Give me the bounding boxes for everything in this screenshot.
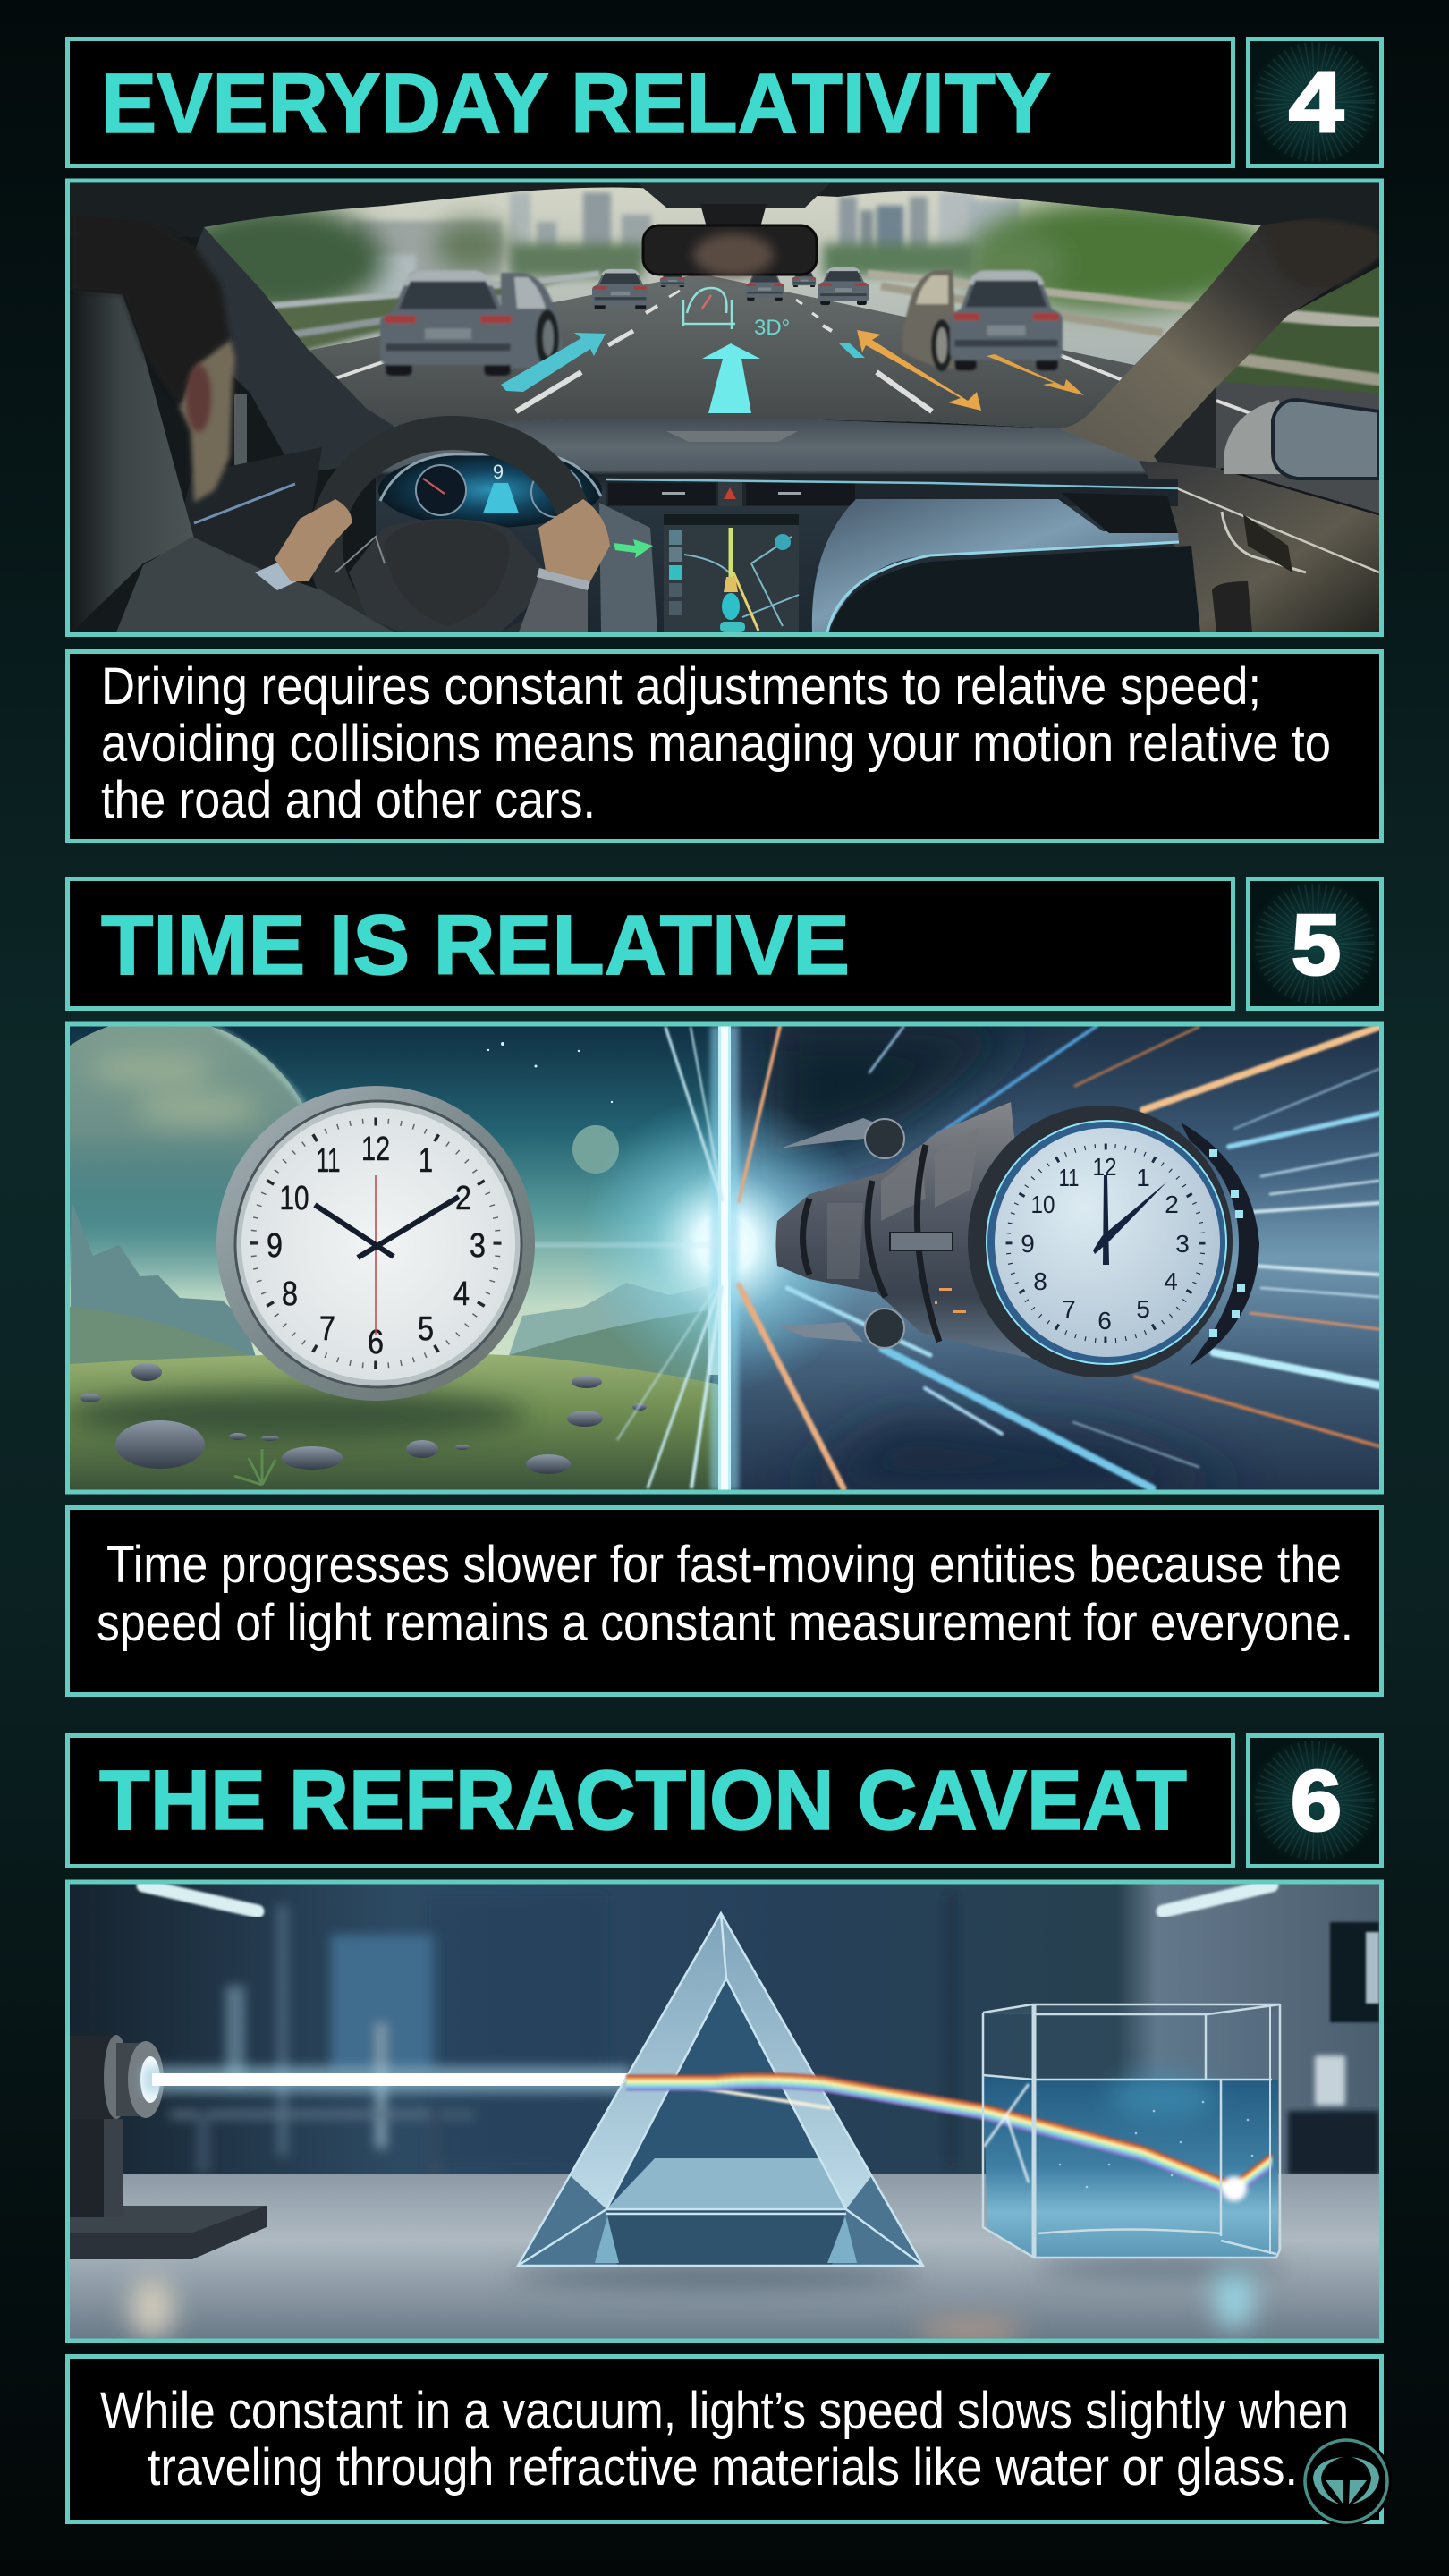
moon [572,1125,619,1174]
console left of screen [599,503,657,632]
caption text [97,1536,1353,1652]
lab wall [70,1884,1379,2175]
left hand [275,499,352,581]
stars [487,1042,613,1103]
caption panel [68,1508,1381,1694]
ship clock numerals: 5 [1136,1295,1150,1323]
rear-view mirror [643,204,817,276]
number badge 6 [1249,1735,1381,1866]
ship hull [776,1102,1038,1360]
clock numerals: 3 [470,1227,486,1265]
illustration: clocks [0,1018,1381,1492]
ship clock hands [1093,1175,1167,1265]
right vent [1062,493,1178,533]
planet clouds [89,1053,259,1127]
ship wing bottom [780,1322,863,1342]
planet limb glow [215,1027,318,1172]
door trim lines [1168,469,1379,572]
windshield view [204,188,1261,428]
prism right facet [721,1913,872,2209]
illustration: prism and water tank [68,1882,1381,2343]
right hills [509,1310,708,1382]
right hand [538,499,610,581]
caption text [101,657,1331,829]
clock numerals: 9 [267,1227,283,1265]
tank water [983,2075,1278,2258]
laser beam [143,2066,631,2093]
clock numerals: 6 [368,1324,384,1361]
badge rays [1275,903,1355,984]
ship engine bottom [865,1309,904,1348]
left door trim [152,447,322,626]
lane dash: teal [839,343,865,358]
prism right corner [832,2175,923,2266]
clock numerals: 2 [455,1180,471,1217]
clock numerals [267,1131,486,1361]
section 6: the refraction caveat [68,1735,1381,2522]
right shirt cuff [537,568,590,590]
lane markings [335,291,1149,411]
roof console [638,183,830,208]
hull plates [827,1127,979,1279]
clock inner ring [235,1101,521,1387]
bottle [1315,2055,1345,2106]
glove box [830,546,1200,632]
hull bracket [890,1233,953,1250]
rainbow starburst [984,2084,1029,2182]
rainbow beam [626,2074,1272,2197]
rocks [80,1363,647,1474]
table [70,2174,1379,2340]
ship clock numerals [1021,1153,1190,1335]
side window view [1199,259,1386,528]
title bar [68,1735,1233,1866]
planet [0,1018,321,1340]
prism edges [518,1913,923,2266]
driver suit shoulder [116,537,394,632]
outer clock ring [968,1106,1233,1377]
clock face [242,1108,515,1380]
ship clock face [995,1128,1220,1357]
dashboard [376,419,1199,632]
ship clock numerals: 10 [1030,1191,1055,1218]
heading: TIME IS RELATIVE [101,898,850,993]
right arm sleeve [519,575,588,632]
prism [518,1913,923,2266]
arrow: orange right [987,354,1084,395]
arrow: orange long [857,330,981,411]
ring lights [1209,1149,1245,1337]
door panel [1139,461,1379,632]
clock numerals: 12 [361,1131,390,1168]
clock rim [216,1086,535,1401]
hull bands [803,1145,939,1342]
light burst [578,1096,873,1391]
blue clock bezel [987,1121,1226,1364]
clock numerals: 7 [319,1310,335,1348]
blurred lab equipment [170,1896,953,2174]
dash top inset [666,431,798,442]
section 5: time is relative [0,878,1381,1694]
caption text [100,2382,1349,2496]
back counter [1288,2111,1379,2175]
wall frame [1330,1922,1379,2022]
ship wing top [780,1118,881,1148]
ship clock numerals: 6 [1097,1307,1112,1335]
ship clock numerals: 7 [1062,1295,1076,1323]
left hills [70,1307,258,1373]
clock numerals: 5 [418,1310,434,1348]
caption text: Driving requires constant adjustments to relative speed; [101,657,1261,716]
upper pillar shadow [1261,220,1379,287]
tank edges [983,2004,1280,2258]
instrument cluster [378,453,602,528]
left: sky [70,1026,725,1375]
laser head [70,2035,164,2119]
heading: EVERYDAY RELATIVITY [101,56,1051,151]
steering wheel [326,433,580,658]
caption text: Time progresses slower for fast-moving entities because the [106,1536,1342,1594]
right dash panel [812,499,1179,632]
title bar [68,878,1233,1009]
instrument cluster: 9 [493,461,504,483]
clock ticks [253,1121,498,1366]
hull lights [935,1288,966,1313]
caption text: the road and other cars. [101,771,596,829]
left side window [234,394,247,465]
ship clock numerals: 4 [1164,1267,1178,1295]
trim line above vents [606,479,1178,488]
table reflections [130,2260,1288,2343]
heading: THE REFRACTION CAVEAT [99,1753,1187,1848]
surrounding cars [660,275,685,287]
grass [70,1352,729,1490]
ship clock numerals: 11 [1059,1164,1079,1191]
illustration frame [68,1882,1381,2341]
clock numerals: 10 [279,1180,309,1217]
plant [234,1449,275,1485]
logo badge [1301,2436,1392,2527]
clock numerals: 8 [282,1275,298,1313]
number: 4 [1289,55,1343,150]
arrow: cyan left lane [501,333,606,392]
caption panel [68,2356,1381,2522]
prism left facet [570,1913,726,2209]
clock numerals: 4 [453,1275,470,1313]
driver seat [72,291,194,632]
driver head [72,209,235,503]
right roof pillar [1058,222,1379,468]
rear ring [1181,1123,1259,1366]
second white beam [648,2080,831,2108]
prism interior lower [606,2158,846,2209]
right mountains [509,1283,708,1377]
badge rays [1275,1760,1355,1841]
right: hyperspace background [725,1026,1379,1490]
vent strip [606,479,1178,506]
ship clock ticks [1008,1146,1203,1341]
beam exit glow [1222,2176,1247,2201]
left side rays [528,1027,723,1488]
water sparkles [1059,2101,1253,2188]
clock numerals: 11 [317,1142,340,1180]
ship clock numerals: 3 [1175,1230,1190,1258]
number badge 5 [1249,878,1381,1009]
number badge 4 [1249,39,1381,166]
frame picture [1366,1932,1379,2004]
ship clock numerals: 1 [1136,1164,1150,1191]
title bar [68,39,1233,166]
prism interior upper [606,1979,846,2209]
green arrow [614,539,653,558]
prism corner highlights [595,2216,619,2263]
ship engine top [865,1119,904,1158]
ground clock [216,1086,535,1401]
headliner edge [70,183,1379,227]
ship clock numerals: 2 [1165,1191,1179,1218]
water bright patch [1109,2075,1216,2120]
number: 5 [1292,897,1341,993]
dark pillar triangle [1154,386,1216,470]
left mountains [70,1201,259,1368]
door handle [1243,514,1292,572]
arrow: cyan centre [702,343,760,413]
ceiling lights [143,1885,1272,1911]
wing mirror [1224,400,1379,479]
laser stand [70,2119,267,2259]
dark corners [769,1026,1252,1490]
illustration frame [68,181,1381,635]
section 4: everyday relativity [68,39,1386,841]
vertical light beam [710,1026,739,1490]
hour and minute hands [315,1197,459,1258]
road surface [309,275,1134,428]
second hand [375,1175,377,1335]
spaceship [776,1102,1259,1377]
ship clock numerals: 12 [1093,1153,1116,1181]
headliner [70,183,1379,237]
HUD label 3D: 3D° [754,316,790,340]
left verge [275,281,564,351]
guardrails [268,274,1199,335]
panel trim [827,542,1179,632]
infotainment screen [664,514,799,632]
caption text: traveling through refractive materials like water or glass. [148,2438,1298,2496]
caption text: avoiding collisions means managing your motion relative to [101,715,1331,773]
ship clock numerals: 9 [1021,1230,1035,1258]
door pull [1212,581,1252,632]
caption panel [68,651,1381,841]
HUD speed indicator [682,288,735,329]
left shirt cuff [255,559,297,590]
central vents [608,481,855,506]
corner highlight right [827,2216,857,2263]
clock shadow [63,1390,528,1440]
illustration: driver view from car [68,181,1386,658]
badge rays [1275,62,1355,142]
ship clock numerals: 8 [1033,1267,1047,1295]
left roof pillar [188,227,394,474]
prism left corner [518,2175,617,2266]
door trim light [194,484,295,523]
illustration frame [68,1024,1381,1492]
water tank back [983,2004,1281,2227]
clock numerals: 1 [419,1142,433,1180]
prism base band [606,2209,846,2266]
streak rays [739,1026,1379,1488]
number: 6 [1291,1753,1342,1849]
